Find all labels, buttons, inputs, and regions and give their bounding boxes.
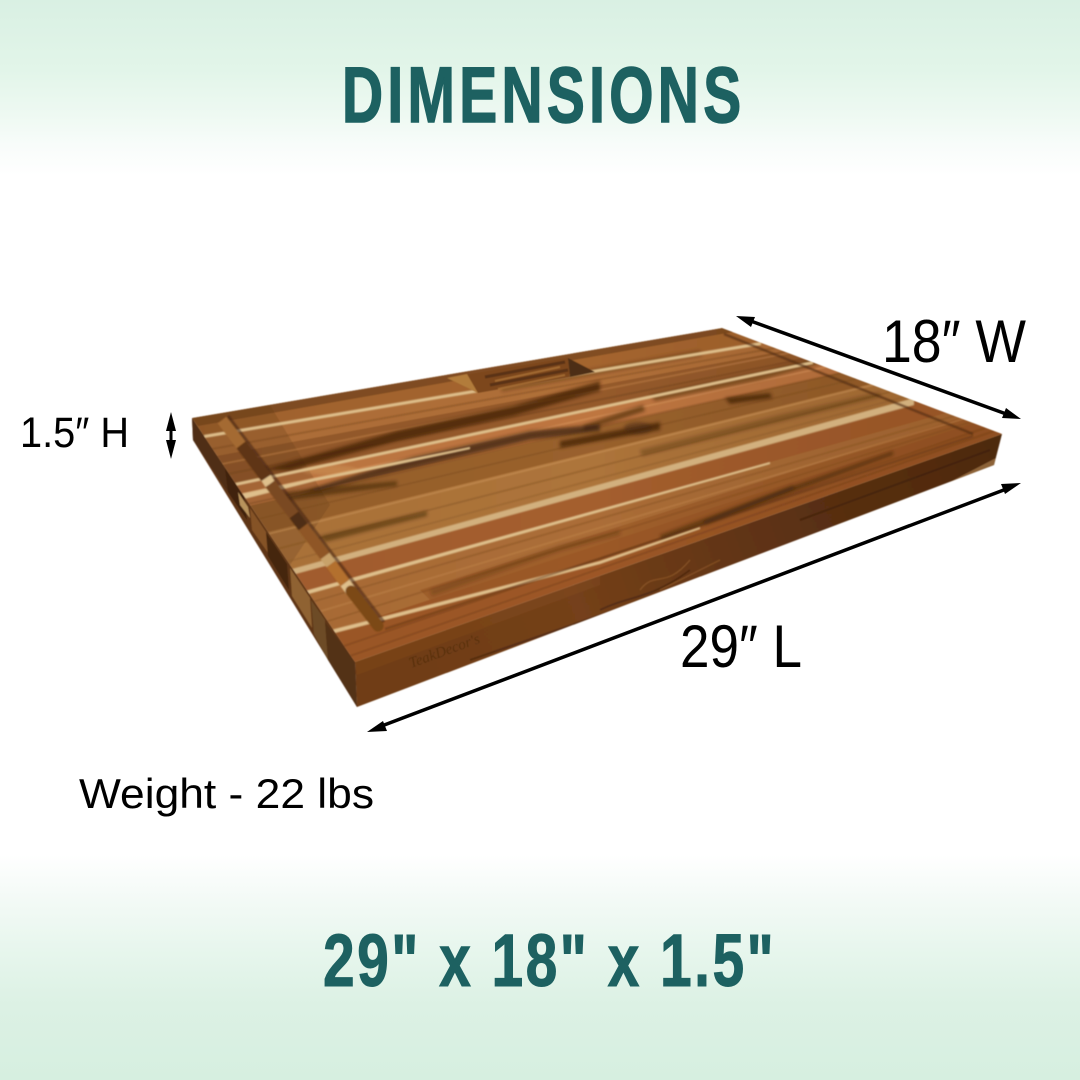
overall dimensions summary: 29" x 18" x 1.5" <box>323 919 776 1002</box>
board front face <box>355 434 1002 707</box>
engraved brand mark: TeakDecor's <box>407 631 482 672</box>
juice groove <box>222 334 973 629</box>
cutting board illustration <box>180 320 1010 707</box>
bottom background gradient <box>0 855 1080 1080</box>
board left end face <box>192 418 357 707</box>
label: height: 1.5″ H <box>20 409 129 457</box>
arrow: length <box>367 483 1021 732</box>
dark grain streaks <box>262 348 893 596</box>
infographic canvas <box>23 66 1026 987</box>
arrow: height <box>166 412 176 459</box>
board top surface <box>180 320 1010 680</box>
top background gradient <box>0 0 1080 175</box>
label: length: 29″ L <box>680 613 802 680</box>
title: DIMENSIONS <box>342 51 745 139</box>
arrow: width <box>736 316 1021 419</box>
handle cut-out <box>447 358 595 393</box>
label: weight: Weight - 22 lbs <box>79 770 374 817</box>
label: width: 18″ W <box>882 308 1026 375</box>
cream sapwood stripes <box>204 342 914 634</box>
wood grain lines <box>212 348 994 657</box>
